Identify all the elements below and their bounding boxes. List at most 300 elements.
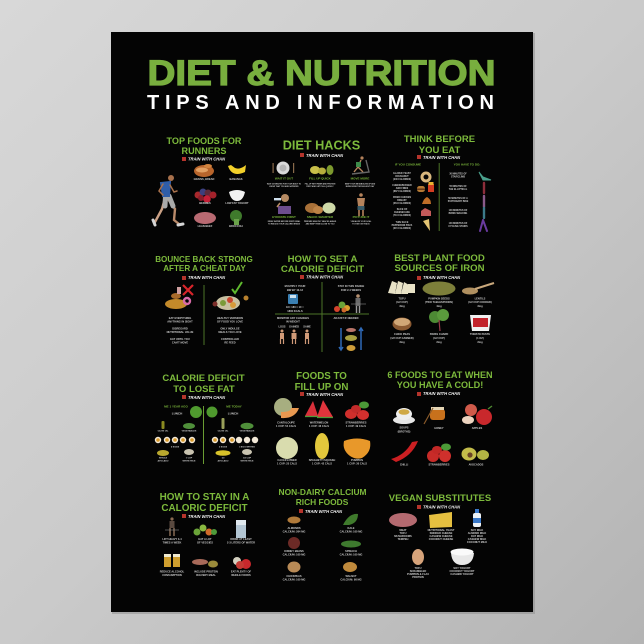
do list: 55 MINUTES OF	[449, 186, 467, 188]
consume list: GLAZED YEAST	[393, 172, 411, 175]
consume list: THIN SLICE	[396, 222, 409, 224]
substitute labels: OAT MILK	[471, 534, 483, 538]
heading: FOODS TO	[296, 371, 347, 382]
hack descriptions: KEEP YOUR METABOLISM UP AND	[345, 182, 376, 186]
deficit labels: EAT A LOT	[198, 537, 212, 541]
cheat day bullets: HEALTHY VERSIONS	[217, 316, 243, 320]
calcium labels: ALMONDS	[287, 526, 301, 530]
consume list: CHEESECAKE	[394, 211, 410, 214]
icon: adjust foods	[345, 328, 357, 351]
meal labels: WHOLE	[159, 458, 168, 460]
meal labels: WHITE RICE	[183, 460, 196, 462]
calorie badge: after	[206, 406, 218, 418]
iron labels: TOFU	[398, 296, 406, 300]
icon: bananas	[228, 165, 246, 174]
fill up labels: 1 CUP: 46 CALS	[309, 424, 329, 428]
hack descriptions: FILL UP WITH FIBER AND PROTEIN	[305, 182, 336, 186]
substitute labels: CASHEW CHEESE	[430, 534, 453, 538]
column headers: YOU HAVE TO DO:	[454, 163, 480, 167]
iron labels: (1/2 CUP COOKED)	[468, 300, 492, 304]
iron labels: (1 OZ)	[476, 336, 484, 340]
do list: 100 MINUTES OF	[449, 210, 468, 212]
heading: HOW TO SET A	[288, 254, 357, 265]
cross dividers	[275, 282, 369, 352]
icon: plate	[272, 162, 294, 174]
food labels: BERRIES	[199, 201, 211, 205]
substitute labels: MEAT	[399, 528, 407, 532]
poster panel	[111, 32, 533, 612]
arrow: up	[359, 328, 363, 350]
hack descriptions: FIRST AND GET FULL QUICKLY	[306, 185, 334, 188]
icon: strawberries	[427, 444, 451, 462]
icon: cantaloupe	[274, 398, 299, 418]
hack descriptions: TO REDUCE YOUR CALORIE INTAKE	[268, 222, 301, 226]
hack labels: MOVE MORE	[351, 176, 369, 180]
brand: TRAIN WITH CHAN	[188, 157, 226, 162]
icon: avocados	[462, 448, 489, 460]
food labels: BANANAS	[230, 177, 243, 181]
food labels: BROCCOLI	[229, 224, 243, 228]
icon: cheese	[429, 512, 452, 528]
panel: stay in a caloric deficit	[160, 492, 255, 577]
panel: how to set a calorie deficit	[275, 254, 369, 352]
icon: left meal	[157, 421, 195, 456]
heading: CALORIE DEFICIT	[281, 264, 364, 275]
calcium labels: SPINACH	[345, 549, 357, 553]
icon: strawberries	[345, 402, 369, 420]
divider	[439, 163, 440, 231]
heading: BOUNCE BACK STRONG	[155, 255, 253, 264]
heading: NON-DAIRY CALCIUM	[279, 487, 366, 497]
panel: plant iron sources	[388, 253, 494, 344]
icon: apples	[233, 557, 251, 569]
poster shadow	[112, 33, 535, 614]
heading: CALORIE DEFICIT	[162, 373, 245, 384]
icon: watermelon	[305, 400, 333, 418]
icon: pumpkin seeds	[422, 282, 456, 296]
hack descriptions: TO STAY ON TRACK	[352, 222, 370, 226]
do list: 100 MINUTES OF	[449, 223, 468, 225]
column headers: LUNCH	[228, 412, 238, 416]
iron labels: 3mg	[477, 304, 483, 308]
cold labels: APPLES	[472, 426, 482, 430]
icon: milk bottle	[473, 509, 481, 527]
icon: check	[232, 282, 242, 293]
iron labels: 3mg	[399, 340, 405, 344]
icon: fried chicken	[422, 197, 431, 204]
step 1 text: EX: 180 × 10 =	[286, 305, 304, 309]
consume list: BREAST	[397, 199, 407, 202]
calcium labels: KALE	[347, 526, 355, 530]
step 1 text: BW BY 10-13	[287, 288, 304, 292]
consume list: (887 CALORIES)	[393, 190, 411, 193]
meal labels: 5 EGGS	[171, 446, 180, 448]
cold labels: CHILLI	[400, 462, 408, 466]
icon: soup	[393, 408, 415, 424]
consume list: AND FRIES	[396, 187, 409, 190]
heading: THINK BEFORE	[404, 134, 475, 145]
heading: RUNNERS	[182, 146, 226, 156]
icon: chickpeas	[392, 318, 412, 330]
consume list: DOUGHNUT	[395, 176, 409, 178]
substitute labels: PROTEIN	[412, 575, 424, 579]
hack labels: SNACK SMARTER	[307, 215, 334, 219]
step 2 text: FOR 2-4 WEEKS	[341, 288, 361, 292]
step 1 text: MULTIPLY YOUR	[285, 284, 305, 288]
heading: TOP FOODS FOR	[167, 136, 242, 146]
calcium labels: CALCIUM: 100 MG	[340, 552, 362, 556]
meal labels: 3 EGGS	[219, 446, 228, 448]
substitute labels: CASHEW YOGURT	[450, 572, 474, 576]
substitute labels: ALMOND MILK	[468, 531, 486, 535]
icon: yogurt bowl	[450, 548, 474, 565]
substitute labels: CASHEW MILK	[468, 537, 486, 541]
iron labels: SWISS CHARD	[430, 332, 448, 336]
panel: foods for a cold	[387, 370, 493, 466]
cold labels: (BROTHS)	[398, 430, 410, 434]
meal labels: OLIVE OIL	[158, 430, 169, 432]
hack labels: FILL UP QUICK	[309, 176, 332, 180]
deficit labels: EAT PLENTY OF	[231, 570, 252, 574]
step 4 text: ADJUST IF NEEDED	[334, 316, 359, 320]
substitute labels: SMOKED CHEESE	[430, 531, 453, 535]
do list: STATIONARY BIKE	[448, 200, 469, 203]
cheat day bullets: NUTRITIONAL VALUE	[167, 330, 194, 334]
fill up labels: PUMPKIN	[351, 458, 363, 462]
icon: veggies	[194, 524, 217, 536]
meal labels: AVOCADO	[157, 460, 169, 462]
iron labels: PUMPKIN SEEDS	[428, 296, 450, 300]
heading: RICH FOODS	[296, 497, 349, 507]
cheat day bullets: DISREGARD	[172, 326, 188, 330]
icon: man lifting	[351, 294, 366, 313]
consume list: FRIED CHICKEN	[393, 197, 411, 199]
heading: HOW TO STAY IN A	[160, 492, 249, 503]
icon: kidney beans	[288, 537, 300, 549]
heading: CALORIC DEFICIT	[161, 503, 248, 514]
hack descriptions: KNOW THAT YOU ARE SATISFIED	[269, 185, 299, 188]
deficit labels: DRINK AT LEAST	[230, 537, 252, 541]
step 2 text: STAY IN THIS RANGE	[338, 284, 364, 288]
panel: non-dairy calcium	[279, 487, 366, 582]
hack descriptions: PREPARE HEALTHY SNACKS AHEAD	[304, 220, 337, 223]
do list: CYCLING STAIRS	[448, 225, 468, 228]
icon: chickpeas	[288, 562, 300, 572]
cheat day bullets: EAT UNTIL YOU	[170, 337, 190, 341]
icon: kale	[343, 514, 358, 525]
consume list: (710 CALORIES)	[393, 214, 411, 217]
icon: cross	[183, 285, 193, 295]
icon: tomato paste	[470, 315, 491, 331]
substitute labels: TOFU	[414, 566, 422, 570]
cold labels: SOUPS	[399, 426, 409, 430]
hack labels: HYDRATE FIRST	[272, 215, 296, 219]
panel: vegan substitutes	[389, 493, 491, 579]
consume list: (364 CALORIES)	[393, 202, 411, 205]
iron labels: 2mg	[477, 340, 483, 344]
icon: broccoli	[230, 210, 242, 225]
iron labels: LENTILS	[475, 296, 486, 300]
calcium labels: CALCIUM: 100 MG	[340, 530, 362, 534]
icon: yogurt	[229, 190, 245, 201]
icon: food pile	[334, 302, 350, 312]
fill up labels: SPAGHETTI SQUASH	[309, 458, 335, 462]
iron labels: 2mg	[436, 340, 442, 344]
icon: lifter	[165, 517, 179, 536]
icon: cauliflower	[276, 437, 298, 459]
heading: FILL UP ON	[295, 382, 348, 393]
calorie badge: before	[190, 406, 202, 418]
icon: honey	[424, 407, 445, 424]
calcium labels: CALCIUM: 98 MG	[340, 578, 362, 582]
deficit labels: WHOLE FOODS	[231, 573, 251, 577]
icon: beers	[164, 554, 180, 567]
hack descriptions: WAIT 20 MINUTES FOR YOUR BODY TO	[267, 182, 302, 186]
column headers: ME TODAY	[226, 404, 242, 408]
meal labels: VEGETABLES	[182, 430, 197, 432]
step 3 text: MONITOR ANY CHANGES	[277, 316, 309, 320]
icon: spinach	[341, 540, 361, 548]
meal labels: WHITE RICE	[241, 460, 254, 462]
brand: TRAIN WITH CHAN	[306, 392, 344, 397]
icon: lean beef	[194, 212, 216, 224]
icon: walnut	[343, 562, 357, 572]
consume list: (315 CALORIES)	[393, 227, 411, 230]
iron labels: 4mg	[436, 304, 442, 308]
icon: lentils spoon	[462, 283, 494, 294]
iron labels: CHICK PEAS	[394, 332, 410, 336]
icon: doughnut	[422, 173, 430, 181]
deficit labels: LIFT HEAVY 3-4	[162, 537, 182, 541]
heading: SOURCES OF IRON	[394, 263, 485, 274]
icon: protein meal	[192, 559, 218, 568]
consume list: (240 CALORIES)	[393, 178, 411, 181]
icon: runner	[153, 175, 183, 225]
substitute labels: COCONUT YOGURT	[450, 569, 475, 573]
calcium labels: CALCIUM: 264 MG	[283, 530, 305, 534]
consume list: SLICE OF	[397, 209, 408, 211]
deficit labels: IN EVERY MEAL	[196, 573, 216, 577]
icon: almonds	[288, 516, 300, 524]
deficit labels: OF VEGGIES	[197, 540, 213, 544]
hack labels: WAIT IT OUT	[275, 176, 293, 180]
icon: right eggs	[212, 437, 258, 443]
substitute labels: SOY MILK	[471, 528, 483, 532]
icon: exercise figures	[479, 172, 491, 231]
icon: pumpkin	[344, 438, 370, 459]
brand: TRAIN WITH CHAN	[188, 275, 226, 280]
step 1 text: 1800 KCALS	[287, 309, 303, 313]
icon: egg	[412, 549, 424, 565]
iron labels: (TWO TABLESPOONS)	[425, 300, 453, 304]
icon: bodies	[280, 330, 309, 344]
hack descriptions: BURN MORE THROUGHOUT DAY	[346, 185, 375, 188]
icon: healthy plate	[212, 296, 248, 310]
do list: STAIRCLIMB	[451, 176, 465, 178]
icon: snacks	[305, 202, 336, 214]
icon: right meal	[216, 418, 254, 456]
fill up labels: 1 CUP: 54 CALS	[276, 424, 296, 428]
brand: TRAIN WITH CHAN	[423, 391, 461, 396]
icon: swiss chard	[429, 309, 449, 331]
heading: YOU EAT	[419, 145, 460, 156]
heading: VEGAN SUBSTITUTES	[389, 493, 491, 504]
brand: TRAIN WITH CHAN	[188, 395, 226, 400]
brand: TRAIN WITH CHAN	[306, 274, 344, 280]
substitute labels: COCONUT MILK	[467, 540, 487, 544]
cheat day bullets: ONLY INDULGE	[220, 326, 240, 330]
heading: DIET HACKS	[283, 138, 360, 152]
hack descriptions: AND KEEP THEM CLOSE TO YOU	[306, 222, 335, 226]
iron labels: 3mg	[399, 304, 405, 308]
column headers: ME 1 YEAR AGO	[164, 404, 189, 408]
arrow: down	[339, 328, 343, 350]
brand: TRAIN WITH CHAN	[423, 275, 461, 280]
calcium labels: CHICKPEAS	[286, 574, 302, 578]
icon: spaghetti squash	[315, 433, 329, 459]
substitute labels: TOFU	[399, 531, 407, 535]
substitute labels: TEMPEH	[398, 537, 409, 541]
icon: chilli	[391, 441, 418, 462]
consume list: CHEESEBURGER	[392, 185, 412, 187]
poster content	[153, 134, 494, 582]
icon: burger and fries	[417, 182, 434, 192]
cheat day bullets: CONTROLLED	[221, 337, 239, 341]
meal labels: 1/2	[221, 458, 225, 460]
cold labels: STRAWBERRIES	[429, 462, 450, 466]
main title: DIET & NUTRITION	[148, 54, 496, 93]
fill up labels: STRAWBERRIES	[346, 420, 367, 424]
icon: tofu	[388, 281, 415, 294]
step 3 text: IN WEIGHT	[286, 320, 300, 324]
do list: BRISK WALKING	[449, 212, 468, 215]
panel: think before you eat	[392, 134, 491, 231]
panel: top foods for runners	[153, 136, 249, 228]
icon: lean man	[357, 193, 365, 216]
meal labels: OLIVE OIL	[218, 430, 229, 432]
calcium labels: CALCIUM: 100 MG	[283, 552, 305, 556]
brand: TRAIN WITH CHAN	[423, 155, 461, 160]
icon: pizza	[423, 219, 430, 231]
substitute labels: NUTRITIONAL YEAST	[428, 528, 455, 532]
panel: calorie deficit to lose fat	[155, 373, 258, 464]
iron labels: TOMATO PASTE	[470, 332, 490, 336]
substitute labels: COCONUT CHEESE	[429, 537, 454, 541]
heading: AFTER A CHEAT DAY	[163, 264, 246, 273]
brand: TRAIN WITH CHAN	[305, 509, 343, 514]
deficit labels: 2-3 LITERS OF WATER	[227, 540, 255, 544]
substitute labels: PUMPKIN & FLAX	[407, 572, 429, 576]
cheat day bullets: CAN'T MOVE	[172, 340, 188, 344]
step 3 text: SAME	[303, 324, 311, 328]
iron labels: (1/2 CUP CANNED)	[390, 336, 414, 340]
fill up labels: CANTALOUPE	[277, 420, 295, 424]
heading: BEST PLANT FOOD	[394, 253, 485, 264]
heading: TO LOSE FAT	[173, 384, 235, 395]
food labels: LOW FAT YOGURT	[225, 201, 249, 205]
icon: meat	[389, 513, 417, 527]
meal labels: AVOCADO	[217, 460, 229, 462]
panel: diet hacks	[267, 138, 376, 226]
calcium labels: WALNUT	[345, 574, 357, 578]
heading: YOU HAVE A COLD!	[397, 380, 483, 390]
substitute labels: MUSHROOMS	[394, 534, 412, 538]
brand: TRAIN WITH CHAN	[188, 514, 226, 519]
cold labels: HONEY	[434, 426, 444, 430]
meal labels: 1 CUP	[186, 458, 193, 460]
food labels: LEAN BEEF	[198, 224, 213, 228]
fill up labels: 1 CUP: 30 CALS	[347, 462, 367, 466]
cheat day bullets: EAT EVERYTHING	[169, 316, 191, 320]
brand: TRAIN WITH CHAN	[306, 153, 344, 158]
icon: avocado	[310, 165, 334, 175]
hack labels: PICTURE IT	[353, 215, 369, 219]
substitute labels: SOY YOGURT	[453, 566, 471, 570]
panel: foods to fill up on	[274, 371, 370, 466]
divider	[203, 406, 204, 464]
do list: 50 MINUTES OF A	[448, 197, 468, 200]
calcium labels: KIDNEY BEANS	[284, 549, 304, 553]
column headers: IF YOU CONSUME	[395, 163, 421, 167]
cheat day bullets: ANYTHING IN SIGHT	[167, 320, 193, 324]
icon: berries	[194, 188, 216, 203]
substitute labels: SCRAMBLED	[410, 569, 426, 573]
heading: 6 FOODS TO EAT WHEN	[387, 370, 493, 380]
icon: whole grains	[194, 164, 214, 177]
cheat day bullets: RE FEED	[224, 340, 236, 344]
cold labels: AVOCADOS	[469, 462, 484, 466]
panel: bounce back strong	[155, 255, 253, 345]
deficit labels: INCLUDE PROTEIN	[194, 570, 218, 574]
do list: THE ELLIPTICAL	[449, 188, 468, 191]
meal labels: 3 EGG WHITES	[239, 446, 255, 448]
fill up labels: WATERMELON	[310, 420, 328, 424]
icon: apples	[462, 404, 492, 425]
deficit labels: TIMES A WEEK	[163, 540, 182, 544]
icon: cheesecake	[421, 208, 431, 216]
deficit labels: REDUCE ALCOHOL	[160, 570, 185, 574]
icon: treadmill runner	[352, 156, 369, 174]
icon: water glass	[236, 520, 246, 538]
fill up labels: 1 CUP: 25 CALS	[277, 462, 297, 466]
food labels: GRAINS, BREAD	[194, 177, 214, 181]
iron labels: (1/2 CUP)	[396, 300, 408, 304]
consume list: PEPPERONI PIZZA	[392, 224, 413, 227]
step 3 text: LOSS	[278, 324, 286, 328]
cheat day bullets: MEALS YOU LOVE	[218, 330, 242, 334]
column headers: LUNCH	[172, 412, 182, 416]
deficit labels: CONSUMPTION	[162, 573, 182, 577]
do list: 30 MINUTES OF	[449, 174, 467, 176]
brand: TRAIN WITH CHAN	[423, 504, 461, 510]
subtitle: TIPS AND INFORMATION	[147, 92, 494, 114]
icon: drinker	[274, 194, 291, 214]
calcium labels: CALCIUM: 100 MG	[283, 578, 305, 582]
icon: left eggs	[155, 437, 195, 443]
hack descriptions: VISUALIZE YOUR GOAL	[351, 220, 372, 223]
icon: junk food	[165, 287, 190, 309]
divider	[204, 285, 205, 345]
fill up labels: 1 CUP: 42 CALS	[312, 462, 332, 466]
fill up labels: 1 CUP: 49 CALS	[346, 424, 366, 428]
hack descriptions: DRINK WATER BEFORE EVERY MEAL	[268, 220, 301, 223]
iron labels: (1/2 CUP)	[433, 336, 445, 340]
meal labels: 1/2 CUP	[243, 458, 252, 460]
cheat day bullets: OF FOOD YOU LOVE	[217, 320, 243, 324]
meal labels: VEGETABLES	[240, 430, 255, 432]
fill up labels: CAULIFLOWER	[277, 458, 297, 462]
step 3 text: GAINED	[289, 324, 299, 328]
